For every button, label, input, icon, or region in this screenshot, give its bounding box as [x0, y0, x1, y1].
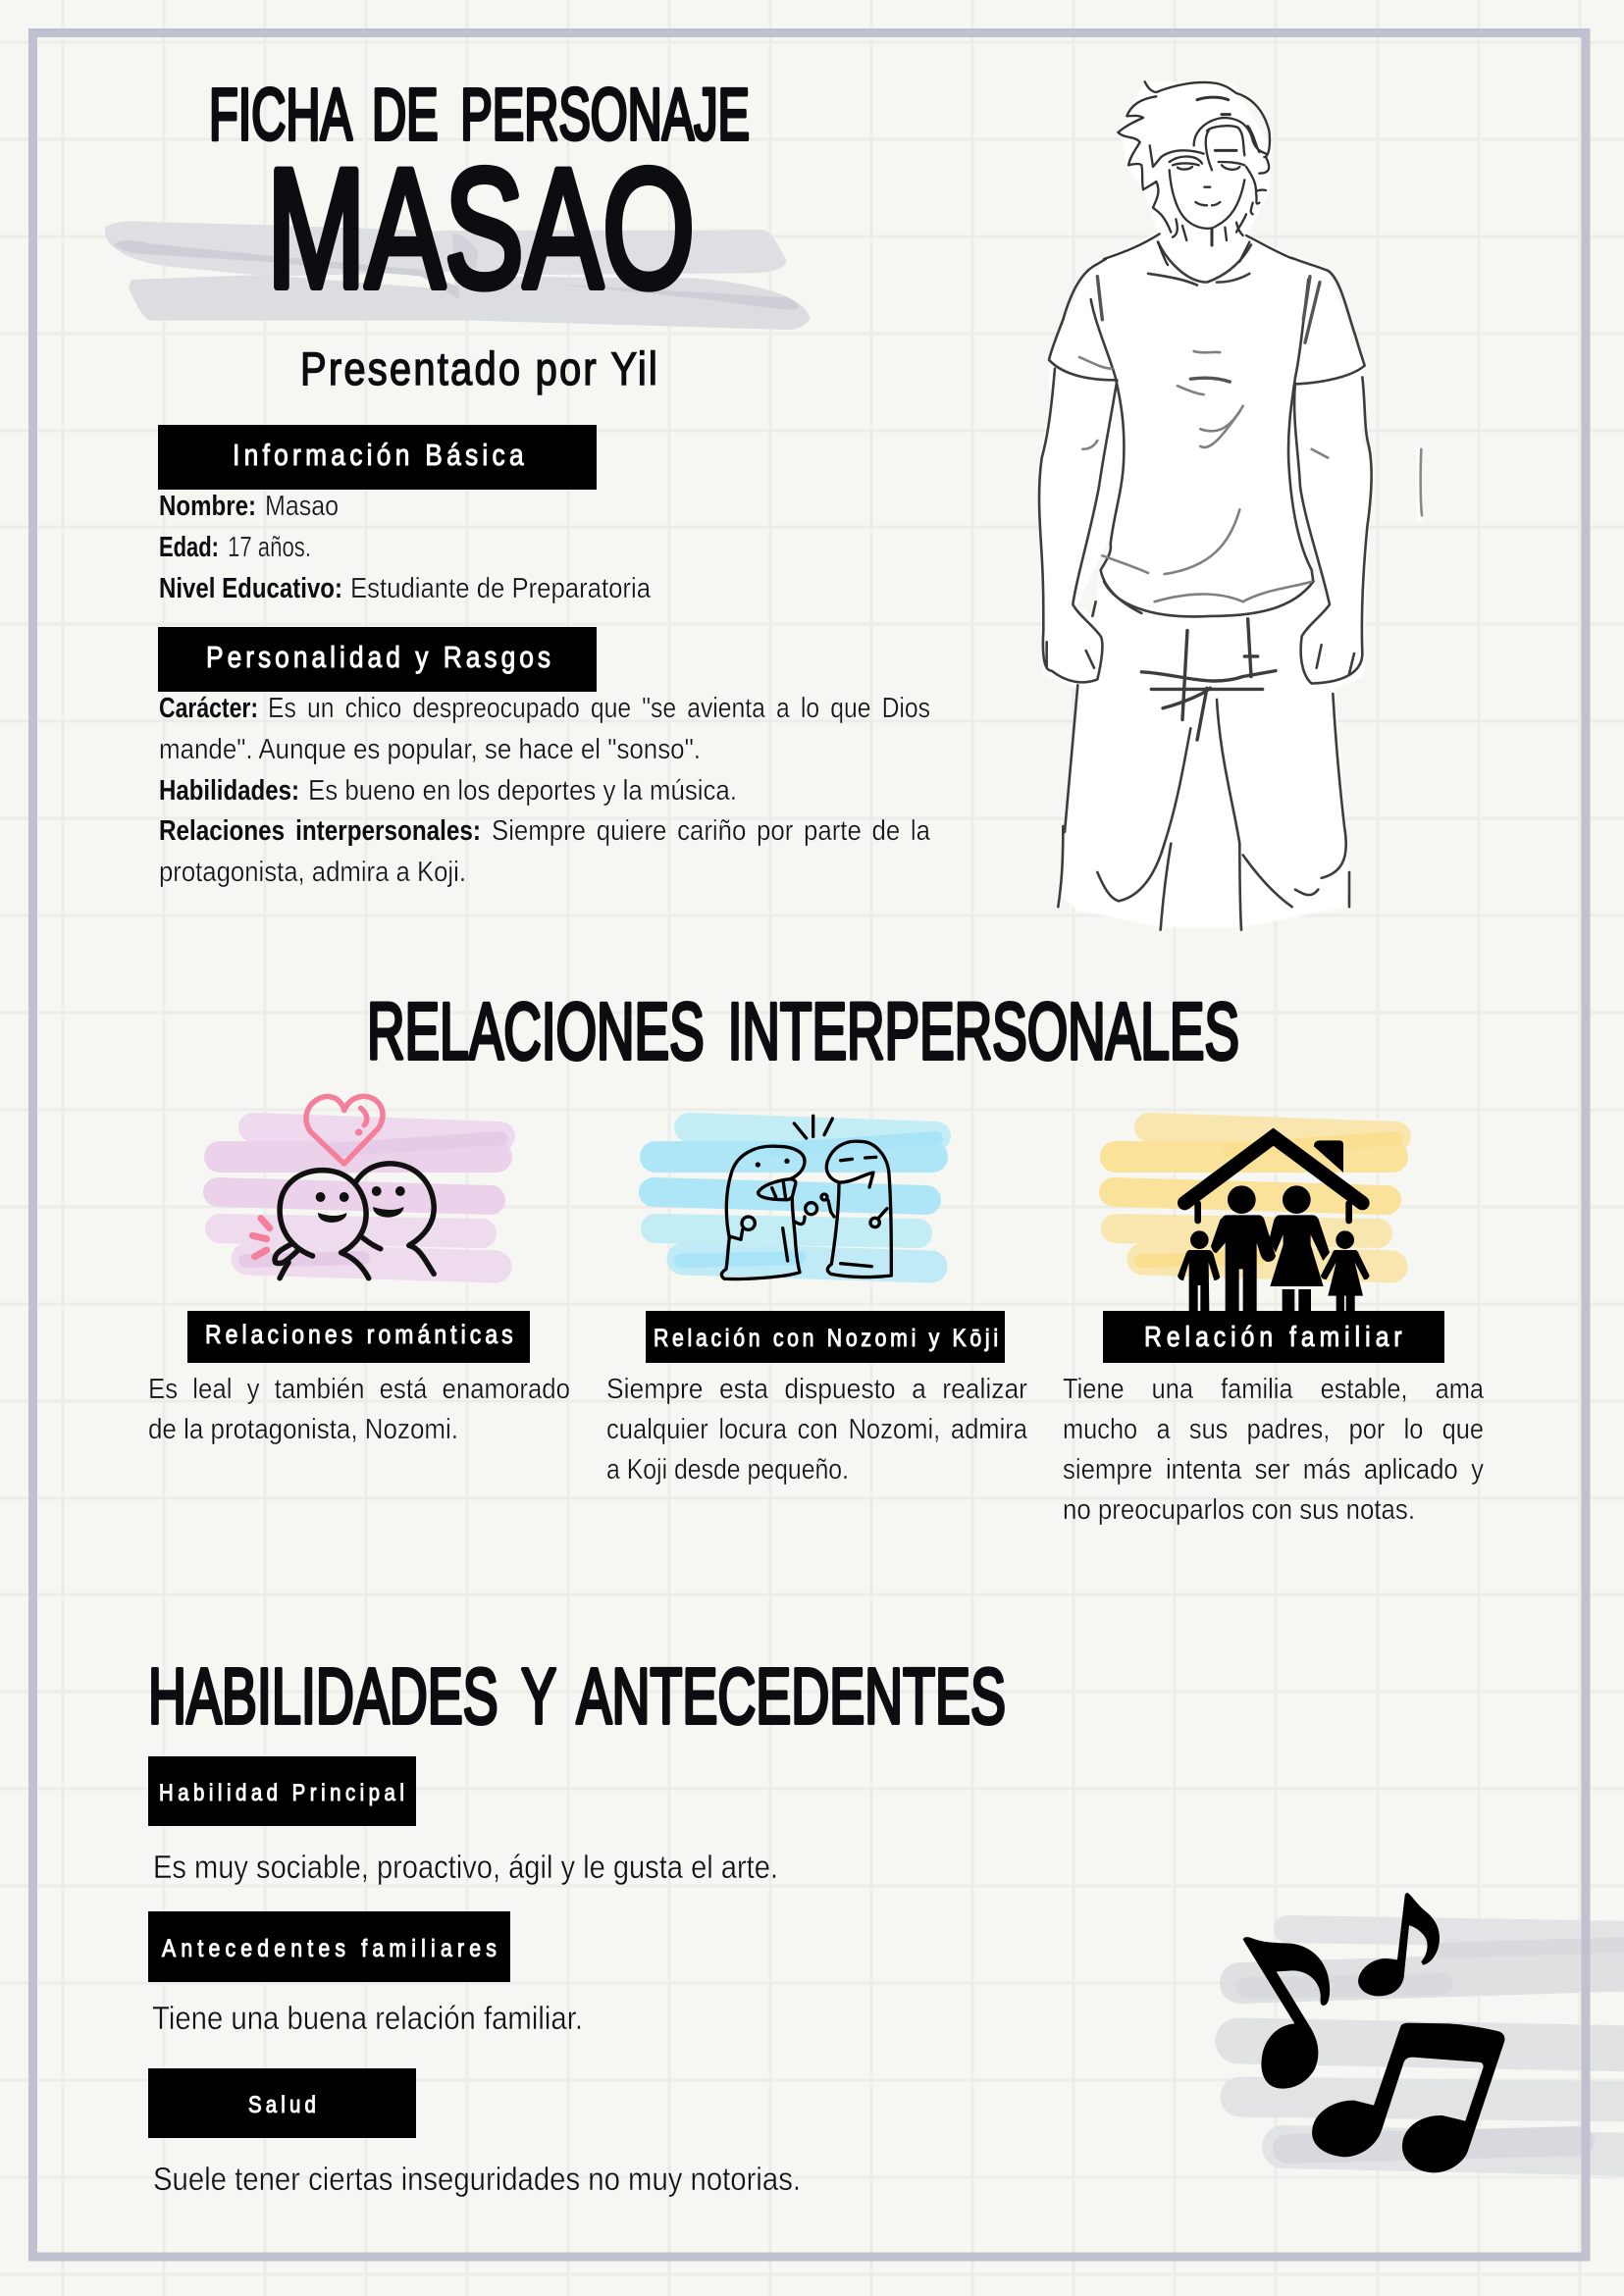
label: family relationship: Relación familiar — [1144, 1321, 1402, 1352]
label: family background: Antecedentes familiares — [162, 1934, 497, 1961]
text: skills — [159, 775, 737, 807]
text: relationships: Relaciones interpersonales: — [159, 815, 481, 847]
text: health description: Suele tener ciertas inseguridades no muy notorias. — [153, 2161, 801, 2197]
text: Nozomi and Koji description: a Koji desde pequeño. — [606, 1454, 849, 1486]
text: family description — [1063, 1374, 1485, 1526]
text: relationships — [159, 815, 931, 888]
text: name — [159, 491, 339, 522]
text: family background description: Tiene una buena relación familiar. — [152, 2000, 583, 2036]
label: romantic relationships: Relaciones románticas — [205, 1320, 513, 1349]
heading: personality and traits — [158, 627, 597, 692]
text: relationships: Siempre quiere cariño por parte de la — [492, 815, 931, 847]
text: education level: Estudiante de Preparatoria — [350, 573, 652, 604]
text: Nozomi and Koji description: Siempre esta dispuesto a realizar — [606, 1374, 1027, 1405]
heading: basic information — [158, 425, 597, 490]
text: education level — [159, 573, 652, 604]
text: age — [159, 532, 311, 563]
icon: two friends talking — [654, 1116, 936, 1279]
text: skills: Habilidades: — [159, 775, 299, 807]
heading: basic information: Información Básica — [233, 439, 524, 473]
panel: basic information — [158, 425, 652, 604]
label: health — [148, 2068, 416, 2138]
text: romantic description: Es leal y también está enamorado — [148, 1374, 570, 1405]
icon: music notes — [1243, 1893, 1504, 2172]
label: relationship with Nozomi and Koji: Relación con Nozomi y Kōji — [654, 1324, 998, 1351]
text: character: mande". Aunque es popular, se hace el "sonso". — [159, 734, 701, 765]
panel: romantic relationships — [148, 1096, 570, 1445]
icon: couple with heart — [218, 1096, 500, 1278]
text: age: 17 años. — [228, 532, 311, 563]
icon: family under a house roof — [1114, 1127, 1396, 1312]
label: main skill — [148, 1756, 416, 1826]
text: skills: Es bueno en los deportes y la música. — [308, 775, 737, 807]
title: ficha de personaje: FICHA DE PERSONAJE — [209, 74, 750, 155]
text: Nozomi and Koji description — [606, 1374, 1028, 1486]
character head — [1104, 81, 1292, 265]
panel: family background — [148, 1911, 583, 2036]
text: Nozomi and Koji description: cualquier locura con Nozomi, admira — [606, 1414, 1028, 1445]
text: character: Es un chico despreocupado que "se avienta a lo que Dios — [268, 693, 930, 724]
text: age: Edad: — [159, 532, 219, 563]
heading: skills and background: HABILIDADES Y ANTECEDENTES — [148, 1652, 1006, 1740]
subtitle: presenter: Presentado por Yil — [300, 344, 657, 395]
panel: family relationship — [1063, 1127, 1485, 1526]
text: main skill description: Es muy sociable, proactivo, ágil y le gusta el arte. — [153, 1849, 778, 1885]
text: character: Carácter: — [159, 693, 258, 724]
label: romantic relationships — [187, 1311, 530, 1363]
panel: relationship with Nozomi and Koji — [606, 1116, 1028, 1486]
panel: personality and traits — [158, 627, 931, 888]
label: family relationship — [1103, 1311, 1444, 1363]
text: character — [159, 693, 930, 765]
character sketch: Masao — [1039, 80, 1422, 930]
text: family description: siempre intenta ser más aplicado y — [1063, 1454, 1484, 1486]
text: relationships: protagonista, admira a Koji. — [159, 857, 466, 888]
music brush stroke — [1238, 1929, 1624, 2155]
label: relationship with Nozomi and Koji — [646, 1311, 1005, 1363]
title brush stroke — [105, 221, 810, 330]
text: family description: mucho a sus padres, por lo que — [1063, 1414, 1484, 1445]
heading: personality and traits: Personalidad y Rasgos — [206, 641, 550, 675]
text: romantic description: de la protagonista, Nozomi. — [148, 1414, 458, 1445]
text: romantic description — [148, 1374, 570, 1445]
text: family description: Tiene una familia estable, ama — [1063, 1374, 1485, 1405]
label: health: Salud — [248, 2091, 316, 2117]
label: family background — [148, 1911, 510, 1982]
label: main skill: Habilidad Principal — [159, 1779, 404, 1805]
panel: health — [148, 2068, 801, 2197]
text: education level: Nivel Educativo: — [159, 573, 342, 604]
text: name: Nombre: — [159, 491, 256, 522]
text: family description: no preocuparlos con sus notas. — [1063, 1494, 1415, 1526]
text: name: Masao — [265, 491, 339, 522]
panel: main skill — [148, 1756, 778, 1885]
title: character name: MASAO — [267, 134, 695, 323]
